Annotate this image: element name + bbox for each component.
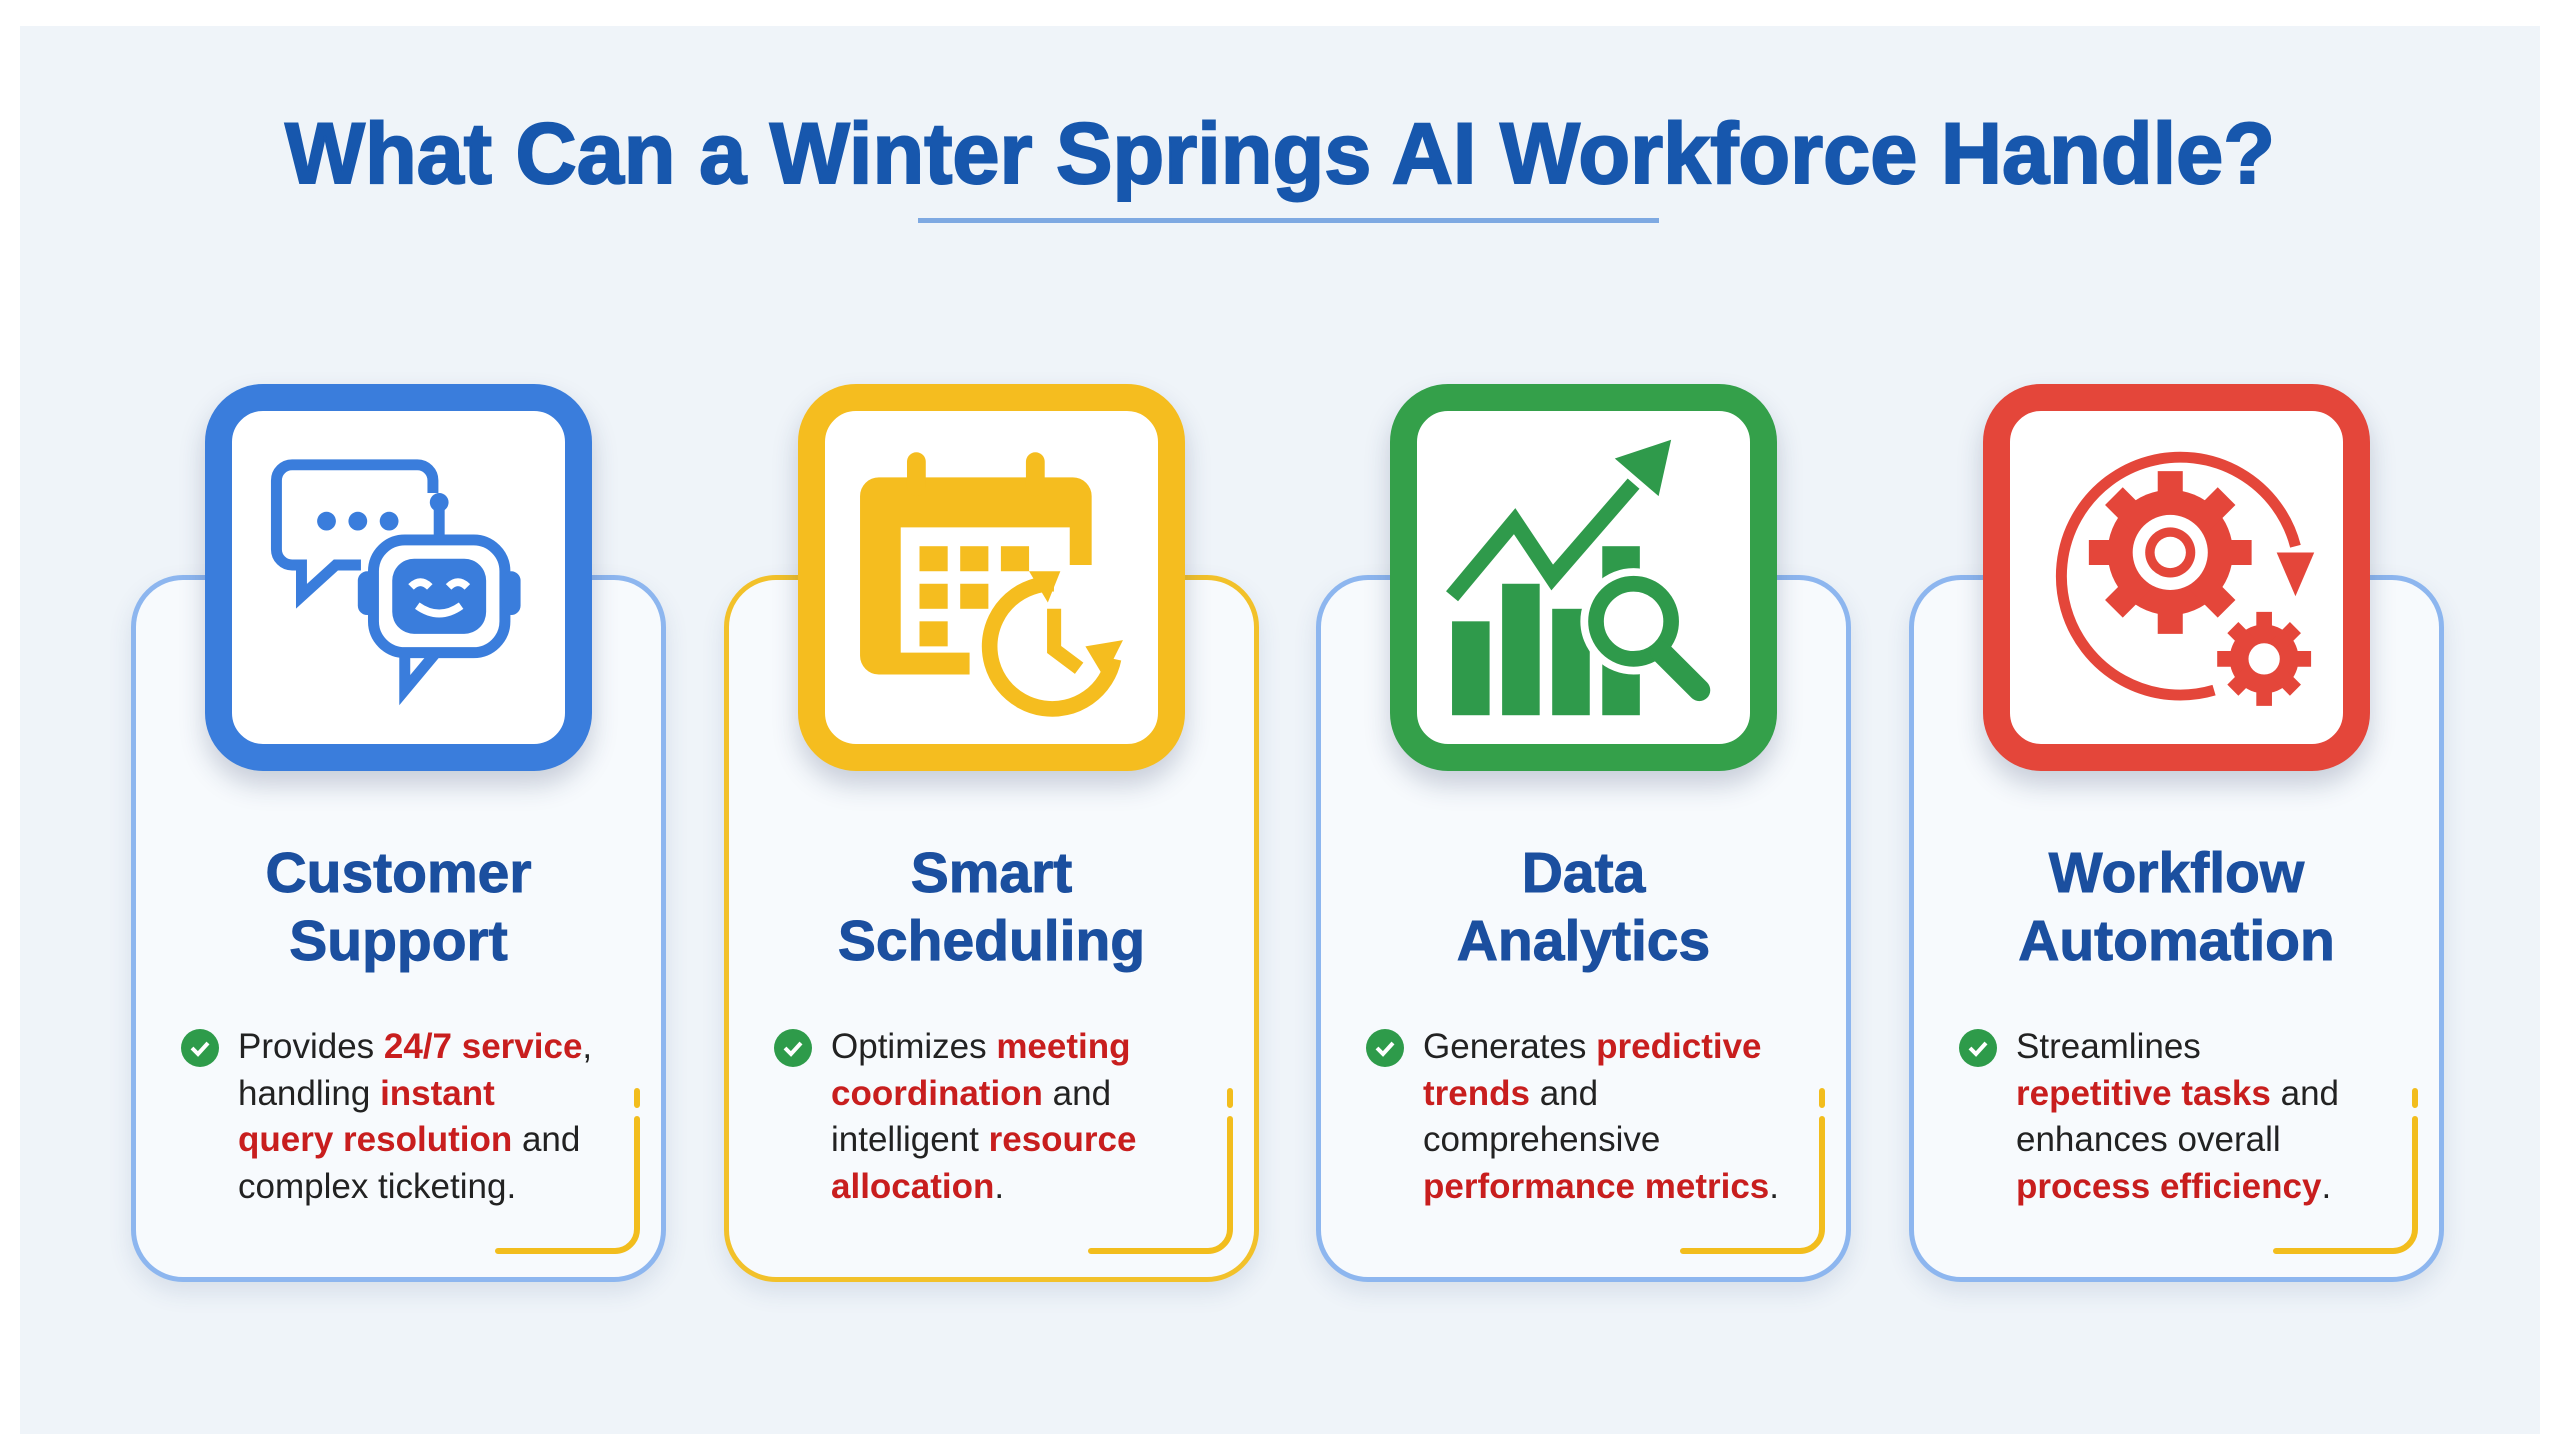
heading: Support — [289, 909, 508, 973]
icon: gears — [1983, 384, 2370, 771]
text block: handling instant — [238, 1074, 495, 1112]
heading: Data — [1522, 841, 1645, 905]
panel: data analytics — [1310, 384, 1856, 1298]
text block: allocation. — [831, 1166, 1004, 1206]
text block: Generates predictive — [1423, 1027, 1762, 1066]
heading: Analytics — [1457, 909, 1710, 973]
panel: smart scheduling — [718, 384, 1264, 1298]
heading — [1457, 841, 1710, 973]
text block: performance metrics. — [1423, 1166, 1779, 1206]
heading — [2018, 841, 2335, 973]
text block: process efficiency. — [2016, 1166, 2331, 1206]
panel: workflow automation — [1904, 384, 2450, 1298]
panel: customer support — [126, 384, 672, 1298]
icon: check — [774, 1029, 812, 1067]
text block: intelligent resource — [831, 1120, 1136, 1159]
text block: Streamlines — [2016, 1027, 2201, 1066]
heading: Customer — [265, 841, 532, 905]
icon: calendar clock — [798, 384, 1185, 771]
text block — [831, 1027, 1136, 1206]
text block — [2016, 1027, 2339, 1206]
heading: Workflow — [2049, 841, 2304, 905]
icon: check — [1959, 1029, 1997, 1067]
title: What Can a Winter Springs AI Workforce Handle? — [285, 106, 2275, 202]
heading — [838, 841, 1145, 973]
text block: complex ticketing. — [238, 1166, 516, 1206]
icon: check — [181, 1029, 219, 1067]
text block — [1423, 1027, 1779, 1206]
text block: Optimizes meeting — [831, 1027, 1131, 1066]
text block: comprehensive — [1423, 1120, 1660, 1159]
icon: chatbot — [205, 384, 592, 771]
icon: chart magnifier — [1390, 384, 1777, 771]
heading: Scheduling — [838, 909, 1145, 973]
heading: Smart — [911, 841, 1072, 905]
text block: trends and — [1423, 1074, 1598, 1112]
heading — [265, 841, 532, 973]
text block — [238, 1027, 592, 1206]
text block: query resolution and — [238, 1120, 580, 1159]
text block: repetitive tasks and — [2016, 1074, 2339, 1112]
text block: enhances overall — [2016, 1120, 2281, 1159]
text block: coordination and — [831, 1074, 1111, 1112]
icon: check — [1366, 1029, 1404, 1067]
text block: Provides 24/7 service, — [238, 1027, 592, 1066]
heading: Automation — [2018, 909, 2335, 973]
